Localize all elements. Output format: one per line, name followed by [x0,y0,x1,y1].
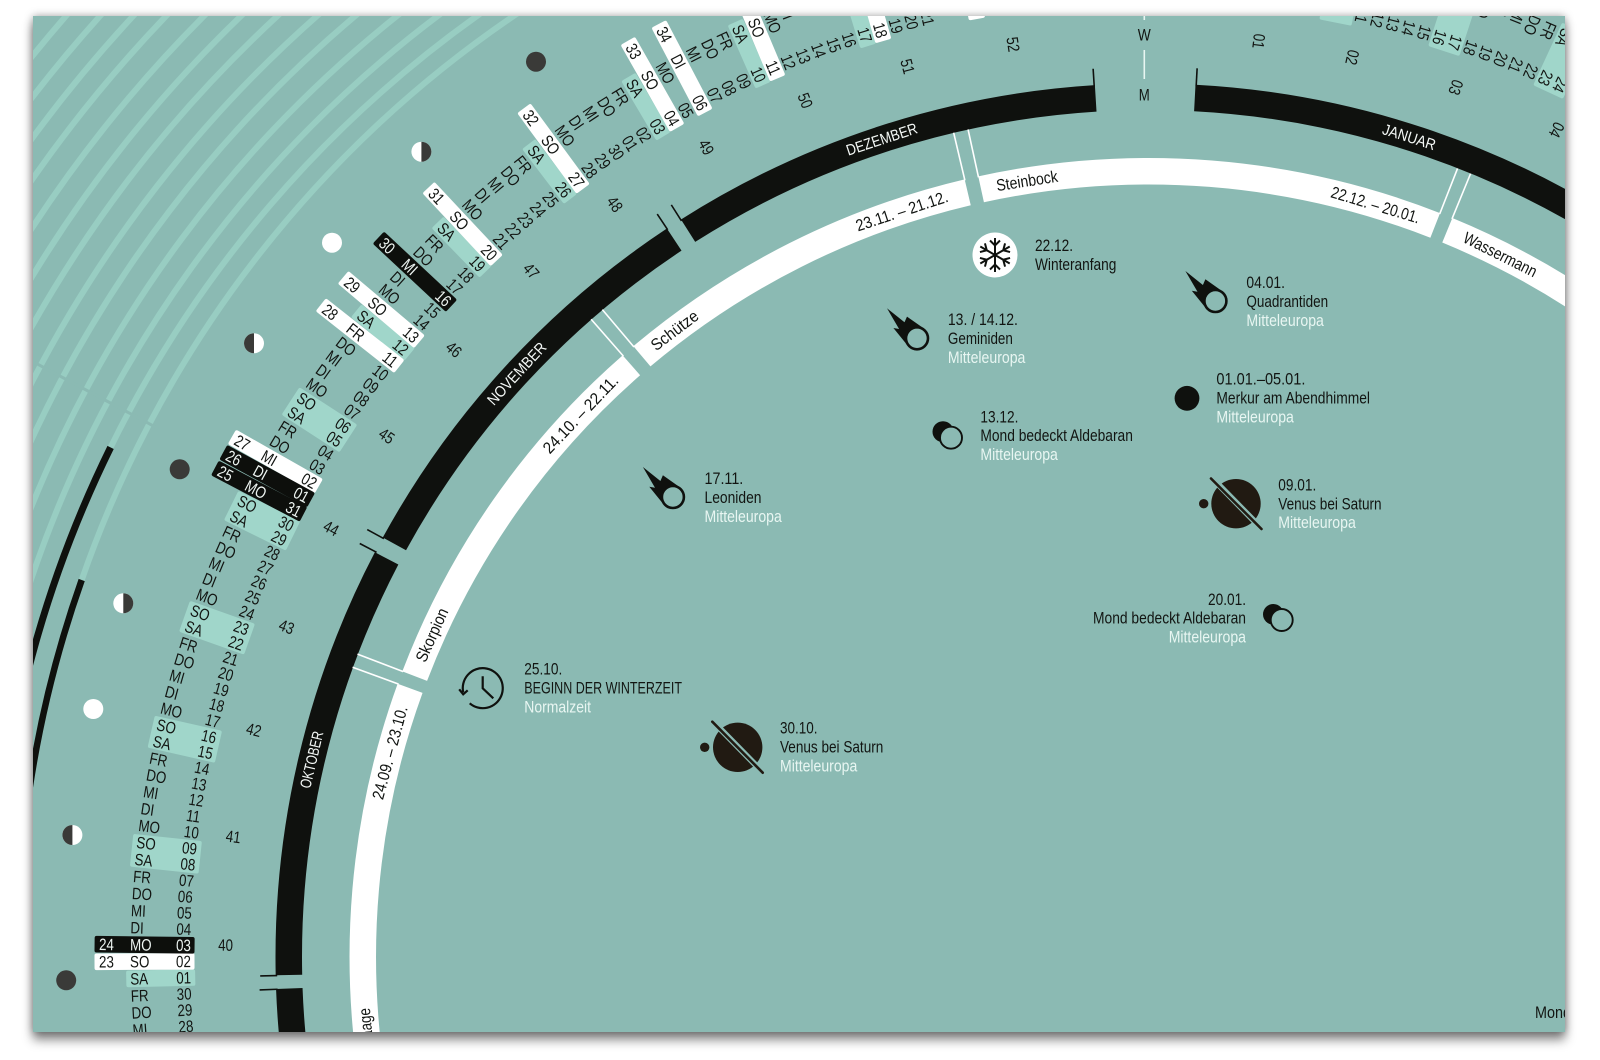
zodiac: Waage: 24.09. – 23.10. [369,704,412,802]
week numbers: 41 [225,827,242,848]
day labels september october: SA [227,507,251,532]
day labels november: DI [312,361,334,384]
day labels september october: DO [145,766,168,788]
day labels september october: SA [130,970,148,989]
week numbers: 43 [276,616,297,639]
day labels september october: DO [213,538,238,563]
zodiac: Skorpion [413,365,631,676]
event: Quadrantiden: Quadrantiden [1246,292,1328,311]
week numbers: 50 [793,90,816,111]
day labels november: DO [409,243,436,271]
event: Geminiden: Mitteleuropa [948,348,1026,367]
week numbers: 46 [442,338,465,362]
day labels november [222,103,627,507]
day labels november: DO [266,432,293,459]
zodiac: Skorpion: 24.10. – 22.11. [540,372,622,457]
day labels november: 06 [331,414,354,438]
day labels november: SO [364,294,390,320]
week numbers: 42 [244,720,263,741]
day labels december: 08 [717,78,740,99]
icon: comet [1185,271,1226,312]
day labels november: 03 [306,456,328,479]
event: Mond bedeckt Aldebaran 20.01.: 20.01. [1208,590,1246,609]
event: Winteranfang [972,232,1116,278]
day labels december: 01 [617,132,641,155]
event: Merkur am Abendhimmel: Mitteleuropa [1216,408,1294,427]
day labels november: DI [250,462,270,485]
event: Venus bei Saturn 09.01.: Venus bei Saturn [1278,494,1382,513]
zodiac: Steinbock [981,168,1435,227]
concentric background arcs [0,11,521,858]
day labels november: 26 [222,447,244,470]
day labels december: FR [712,29,737,53]
day labels january: 21 [1503,55,1526,75]
day labels december: 34 [652,24,675,46]
day labels december: SA [728,22,752,46]
day labels september october: 09 [181,839,198,859]
day labels september october: MO [130,936,152,955]
day labels november: 09 [359,374,382,398]
day labels september october: 04 [176,920,192,939]
day labels november: 05 [323,428,345,452]
month: oktober: OKTOBER [297,730,327,790]
event: Leoniden [643,467,782,526]
day labels november: 24 [526,199,549,222]
event: Quadrantiden: 04.01. [1246,273,1285,292]
day labels november: 30 [375,234,398,258]
day labels september october: SA [182,618,205,641]
day labels september october: 07 [178,871,195,891]
day labels november: DI [386,268,408,291]
event: Merkur am Abendhimmel [1175,370,1370,427]
day labels september october: SO [135,834,157,854]
icon: saturn and venus [700,722,763,773]
day labels november: MO [550,122,578,150]
day labels november: 17 [442,275,466,299]
icon: mercury [1175,386,1199,411]
icon: saturn and venus [1199,478,1262,529]
day labels september october: 12 [187,790,205,811]
day labels november: SO [293,389,319,415]
event: Winteranfang: 22.12. [1035,236,1073,255]
day labels november: 12 [389,336,412,360]
day labels november: 31 [424,185,448,209]
day labels november: MI [483,174,507,197]
day labels january: 22 [1518,61,1542,82]
day labels september october: 29 [268,527,290,551]
day labels december: 07 [702,85,726,106]
zodiac: Schuetze [642,188,968,356]
day labels september october: MO [193,586,220,611]
event: Leoniden: 17.11. [704,469,743,488]
day labels september october: 01 [176,969,191,988]
day labels september october: 29 [177,1001,193,1021]
day labels november: MO [458,196,486,225]
day labels december: 16 [837,30,860,50]
day labels september october: 24 [99,936,114,955]
day labels september october: 23 [231,617,251,640]
day labels september october: 14 [193,758,211,780]
day labels november: 23 [513,209,537,232]
black highlighted rows [94,232,457,954]
day labels december: 05 [673,100,697,122]
event: Winteranfang: Winteranfang [1035,255,1116,274]
zodiac: Steinbock: 22.12. – 20.01. [1329,184,1422,227]
day labels january: 23 [1533,67,1556,88]
day labels november: 08 [349,387,372,411]
day labels december: SO [743,16,768,41]
day labels december: 09 [731,71,755,92]
month: januar [1195,98,1600,252]
month: september [289,988,294,1047]
day labels december: 19 [884,17,906,36]
day labels november: 21 [489,230,512,254]
day labels september october: 28 [261,542,283,565]
week numbers: 03 [1444,77,1466,97]
day labels december: 33 [621,41,645,63]
day labels january: 15 [1412,23,1434,42]
day labels september october: 31 [282,498,304,522]
day labels september october: DO [131,1003,152,1023]
day labels november: SO [445,208,472,235]
week numbers: 45 [375,425,398,448]
day labels september october: MI [206,554,227,577]
event: Beginn der Winterzeit: 25.10. [524,660,562,679]
day labels november: 18 [453,264,477,287]
day labels september october: 15 [196,742,214,764]
day labels november: 10 [369,361,392,385]
event: Venus bei Saturn 09.01.: Mitteleuropa [1278,513,1356,532]
day labels november: DI [470,185,493,207]
day labels september october: 26 [248,572,269,595]
week numbers: 47 [519,260,543,283]
icon: comet [643,467,684,508]
day labels september october: SO [188,602,212,626]
event: Mond bedeckt Aldebaran 13.12. [932,407,1133,464]
day labels november: MI [578,103,602,126]
day labels november: 07 [340,401,363,425]
day labels september october: 18 [207,695,226,717]
event: Mond bedeckt Aldebaran 13.12.: 13.12. [980,407,1018,426]
zodiac: Steinbock: Steinbock [995,168,1060,195]
week numbers: 49 [694,136,717,158]
month: november: NOVEMBER [484,339,550,409]
day labels december: DO [593,94,619,121]
day labels november: 28 [577,159,601,182]
day labels january [1350,0,1591,95]
day labels november: SA [523,142,549,168]
day labels november: 13 [399,323,422,347]
day labels november: 02 [298,470,320,493]
moon: half [411,142,431,162]
icon: clock [459,668,503,708]
zodiac: Wassermann [1447,229,1600,355]
week numbers: 52 [1002,36,1023,53]
day labels december: 18 [868,21,891,40]
year gap marker W / M: M [1139,86,1150,104]
day labels september october: 27 [255,557,276,580]
day labels december: 11 [761,58,784,78]
day labels january: 14 [1397,18,1419,38]
day labels september october: 25 [214,462,236,486]
event: Mond bedeckt Aldebaran 20.01.: Mond bedeckt Aldebaran [1093,609,1246,628]
event: Merkur am Abendhimmel: 01.01.–05.01. [1216,370,1305,389]
day labels september october: DO [172,650,196,674]
event: Quadrantiden [1185,271,1328,330]
day labels november: 04 [314,442,337,465]
event: Venus bei Saturn 30.10. [700,719,883,776]
day labels november: MI [322,347,345,371]
day labels september october: FR [148,749,169,771]
day labels september october: SO [234,492,260,517]
day labels november: DI [564,112,587,134]
day labels november: 29 [340,274,363,298]
day labels september october: DI [139,800,155,820]
year gap marker W / M: W [1138,26,1151,44]
event: Beginn der Winterzeit [459,660,682,716]
day labels november: MO [302,375,331,402]
day labels november: MO [375,281,403,309]
day labels january: 16 [1428,27,1450,47]
week numbers [218,33,1568,955]
day labels november: DO [496,163,524,190]
day labels november: 20 [477,241,500,265]
day labels september october: 17 [203,711,222,732]
day labels september october: DO [131,885,153,905]
month: dezember: DEZEMBER [844,120,920,160]
day labels september october: 08 [180,855,196,875]
event: Geminiden: 13. / 14.12. [948,310,1018,329]
zodiac: Waage [356,688,412,1051]
day labels september october: DI [200,570,219,592]
day labels september october: 30 [275,513,297,536]
day labels september october: DI [130,919,144,938]
day labels september october: MI [142,783,160,804]
moon: full [83,699,103,719]
day labels september october: SO [130,953,149,972]
event: Mond bedeckt Aldebaran 13.12.: Mitteleuropa [980,445,1058,464]
month: oktober [289,558,387,975]
day labels december: MO [651,59,678,87]
day labels september october: SO [155,716,178,739]
day labels november: MI [258,447,280,471]
week numbers: 48 [602,193,626,216]
event: Geminiden [887,308,1026,367]
day labels december: MI [681,44,705,65]
day labels november: 32 [518,107,542,130]
day labels december: 17 [853,25,875,45]
day labels november: 27 [564,169,588,192]
event: Mond bedeckt Aldebaran 13.12.: Mond bedeckt Aldebaran [980,426,1133,445]
day labels january: 17 [1443,32,1465,52]
week numbers: 51 [896,57,918,76]
event: Venus bei Saturn 30.10.: Venus bei Saturn [780,738,883,757]
moon phases [56,52,546,990]
day labels january: 18 [1458,38,1481,58]
zodiac: Skorpion: Skorpion [413,606,452,665]
event: Venus bei Saturn 30.10.: Mitteleuropa [780,757,858,776]
icon: snowflake [972,232,1018,278]
event: Beginn der Winterzeit: Normalzeit [524,697,591,716]
day labels september october: 10 [183,823,200,843]
day labels september october: 23 [99,953,114,972]
event: Venus bei Saturn 09.01.: 09.01. [1278,476,1316,494]
day labels november: SO [537,132,563,158]
day labels november: 11 [378,348,401,372]
day labels september october: 11 [185,807,201,827]
day labels november: SA [284,403,309,428]
week numbers: 02 [1341,48,1362,67]
day labels september october: SA [134,851,153,871]
day labels december: 06 [688,92,711,114]
day labels september october [99,462,304,1040]
day labels december: 10 [746,64,769,86]
day labels december: DO [697,36,722,62]
week numbers: 01 [1248,33,1268,50]
event: Merkur am Abendhimmel: Merkur am Abendhimmel [1216,389,1370,408]
zodiac ring [353,129,1600,1051]
moon: new moon [170,459,190,479]
month: dezember [688,98,1096,231]
day labels september october: 25 [242,587,263,610]
year gap marker W / M [1138,14,1151,104]
day labels november: 19 [465,252,489,276]
day labels september october: SA [151,733,172,755]
icon: occultation [1263,604,1293,631]
day labels september october: 24 [236,602,257,625]
moon: half [62,825,82,845]
day labels december: 03 [645,116,669,138]
icon: occultation [932,421,962,449]
day labels january: 19 [1473,43,1496,63]
day labels january: FR [1535,19,1560,42]
zodiac: Wassermann: Wassermann [1460,229,1540,281]
day labels november: 25 [538,189,562,212]
day labels november: FR [275,418,300,443]
day labels november: SA [353,307,378,332]
day labels november: 28 [318,301,341,325]
day labels december: 12 [776,52,799,73]
day labels november: 22 [501,220,525,243]
day labels november: 15 [420,299,444,323]
day labels september october: 19 [211,679,231,701]
day labels september october: 06 [177,888,193,907]
month boundary ticks [260,68,1197,990]
day labels september october: MI [131,902,146,921]
day labels december: 04 [659,108,683,130]
day labels september october: DI [163,683,180,704]
day labels september october: 13 [190,774,208,795]
week numbers: 44 [320,517,342,541]
event: Mond bedeckt Aldebaran 20.01. [1093,590,1293,647]
month: november [394,240,674,544]
month ring [260,68,1600,1047]
moon: half [244,333,264,353]
day labels september october: FR [132,868,152,888]
event: Beginn der Winterzeit: BEGINN DER WINTERZEIT [524,678,682,697]
day labels december: FR [607,85,632,110]
day labels november: 01 [290,484,312,507]
event: Quadrantiden: Mitteleuropa [1246,311,1324,330]
event: Venus bei Saturn 30.10.: 30.10. [780,719,818,738]
day labels september october: MO [242,477,269,503]
event: Venus bei Saturn 09.01. [1199,476,1382,532]
zodiac: Schuetze: Schütze [648,307,702,355]
day labels december: 15 [822,35,844,55]
month: januar: JANUAR [1380,121,1438,154]
week numbers: 40 [218,936,233,955]
day labels september october: 21 [221,648,240,670]
day labels january: 20 [1489,49,1511,69]
day labels december: 13 [791,46,814,67]
event: Leoniden: Leoniden [704,488,762,507]
day labels september october: 30 [176,985,192,1004]
moon: new moon [526,52,546,72]
day labels november: SA [433,219,459,245]
icon: comet [887,308,928,349]
event: Mond bedeckt Aldebaran 20.01.: Mitteleuropa [1169,628,1246,647]
day labels september october: FR [219,523,244,547]
day labels december: 02 [631,124,655,146]
day labels december: SA [622,76,647,101]
day labels september october: 20 [216,664,236,686]
zodiac: Schuetze: 23.11. – 21.12. [854,188,950,235]
day labels september october: MI [167,666,187,688]
day labels september october: FR [177,634,200,657]
day labels november: DO [332,333,359,360]
day labels december: SO [636,68,662,94]
day labels november: 29 [590,150,614,173]
day labels november: FR [342,320,368,346]
day labels november: 14 [409,311,433,335]
day labels december [593,0,937,155]
day labels september october: 16 [199,726,218,748]
day labels september october: 03 [176,937,191,956]
white highlighted rows [94,0,985,970]
event: Geminiden: Geminiden [948,329,1013,348]
day labels september october: 02 [176,953,191,972]
day labels november: 30 [604,141,627,164]
day labels september october: MO [137,817,161,838]
day labels december: DI [666,51,689,72]
day labels november: 16 [431,287,455,311]
day labels september october: 05 [177,904,192,923]
zodiac boundary ticks [353,129,1471,684]
day labels november: FR [510,152,535,178]
event: Leoniden: Mitteleuropa [704,507,782,526]
day labels november: 27 [231,432,253,455]
day labels december: 14 [807,40,829,61]
moon: full [322,233,342,253]
day labels september october: MO [159,699,184,723]
events [459,232,1571,1022]
day labels november: FR [421,231,447,257]
day labels september october: 22 [226,633,246,655]
day labels september october: FR [130,987,149,1006]
moon: half [113,593,133,613]
moon: new moon [56,970,76,990]
day labels november: 26 [551,179,575,202]
day labels november: MI [397,256,421,279]
